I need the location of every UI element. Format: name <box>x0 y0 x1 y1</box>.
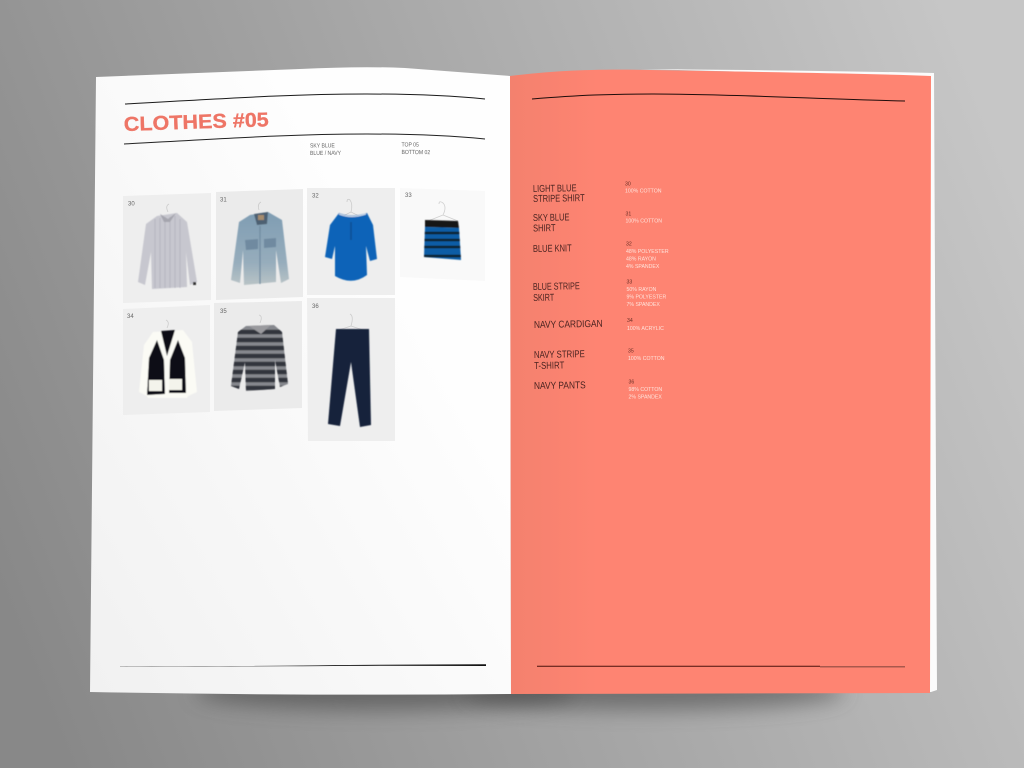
item 35: navy stripe t-shirt: 35 <box>628 348 634 354</box>
photo 31: sky blue shirt <box>216 189 303 300</box>
item 32: blue knit: BLUE KNIT <box>533 242 572 254</box>
item 36: navy pants <box>534 380 662 400</box>
item 30: light blue stripe shirt: STRIPE SHIRT <box>533 192 585 204</box>
photo 33: blue stripe skirt: 33 <box>405 193 412 199</box>
photo 32: blue knit <box>307 188 395 295</box>
item 36: navy pants: NAVY PANTS <box>534 380 586 391</box>
item 31: sky blue shirt <box>533 211 662 234</box>
item 36: navy pants: 36 <box>628 380 634 386</box>
item 32: blue knit: 32 <box>626 242 632 248</box>
item 35: navy stripe t-shirt: T-SHIRT <box>534 360 565 371</box>
photo 35: navy stripe t-shirt <box>214 301 302 411</box>
item 35: navy stripe t-shirt <box>534 348 665 371</box>
page shadow <box>195 674 845 710</box>
title: CLOTHES #05 <box>123 109 269 136</box>
top rule <box>125 94 485 104</box>
column note: types: TOP 05 <box>401 142 419 149</box>
item list <box>533 182 669 400</box>
item 33: blue stripe skirt: 7% SPANDEX <box>626 302 660 308</box>
right page white back edge <box>640 69 937 692</box>
item 31: sky blue shirt: SKY BLUE <box>533 211 570 223</box>
photo 30: light blue stripe shirt <box>123 193 211 303</box>
item 33: blue stripe skirt: SKIRT <box>533 291 555 303</box>
item 34: navy cardigan: 100% ACRYLIC <box>627 326 664 332</box>
column note: colours: BLUE / NAVY <box>310 151 341 157</box>
item 30: light blue stripe shirt <box>533 182 662 204</box>
item 32: blue knit: 48% RAYON <box>626 256 656 262</box>
item 34: navy cardigan: NAVY CARDIGAN <box>534 318 603 330</box>
item 30: light blue stripe shirt: 30 <box>625 182 631 188</box>
photo 30: light blue stripe shirt: 30 <box>128 202 135 208</box>
item 33: blue stripe skirt: 9% POLYESTER <box>626 294 666 300</box>
item 31: sky blue shirt: 100% COTTON <box>626 218 662 224</box>
item 30: light blue stripe shirt: LIGHT BLUE <box>533 182 577 194</box>
right page <box>510 70 931 694</box>
column note: colours: SKY BLUE <box>310 143 335 150</box>
item 32: blue knit: 4% SPANDEX <box>626 264 660 270</box>
item 34: navy cardigan <box>534 318 664 332</box>
left page <box>90 67 511 695</box>
item 32: blue knit <box>533 242 669 270</box>
item 31: sky blue shirt: 31 <box>626 212 631 218</box>
photo 31: sky blue shirt: 31 <box>220 198 227 204</box>
item 35: navy stripe t-shirt: NAVY STRIPE <box>534 348 585 360</box>
photo 34: navy cardigan: 34 <box>127 314 134 320</box>
photo 35: navy stripe t-shirt: 35 <box>220 309 227 315</box>
item 30: light blue stripe shirt: 100% COTTON <box>625 188 662 194</box>
photo 36: navy pants <box>307 298 395 441</box>
column note: types: BOTTOM 02 <box>401 150 430 156</box>
item 33: blue stripe skirt <box>533 280 666 308</box>
item 34: navy cardigan: 34 <box>627 318 633 324</box>
photo 36: navy pants: 36 <box>312 304 319 310</box>
item 31: sky blue shirt: SHIRT <box>533 222 556 234</box>
item 33: blue stripe skirt: 50% RAYON <box>626 287 657 293</box>
item 33: blue stripe skirt: 33 <box>626 280 632 286</box>
item 36: navy pants: 98% COTTON <box>628 387 662 393</box>
photo 33: blue stripe skirt <box>405 192 462 261</box>
right top rule <box>532 94 905 101</box>
item 32: blue knit: 48% POLYESTER <box>626 249 669 255</box>
bottom rule <box>120 664 486 667</box>
photo 34: navy cardigan <box>123 305 210 415</box>
item 33: blue stripe skirt: BLUE STRIPE <box>533 280 580 292</box>
item 35: navy stripe t-shirt: 100% COTTON <box>628 356 665 362</box>
item 36: navy pants: 2% SPANDEX <box>628 394 662 400</box>
photo 32: blue knit: 32 <box>312 194 319 200</box>
second rule <box>124 134 485 144</box>
right bottom rule <box>537 666 905 668</box>
